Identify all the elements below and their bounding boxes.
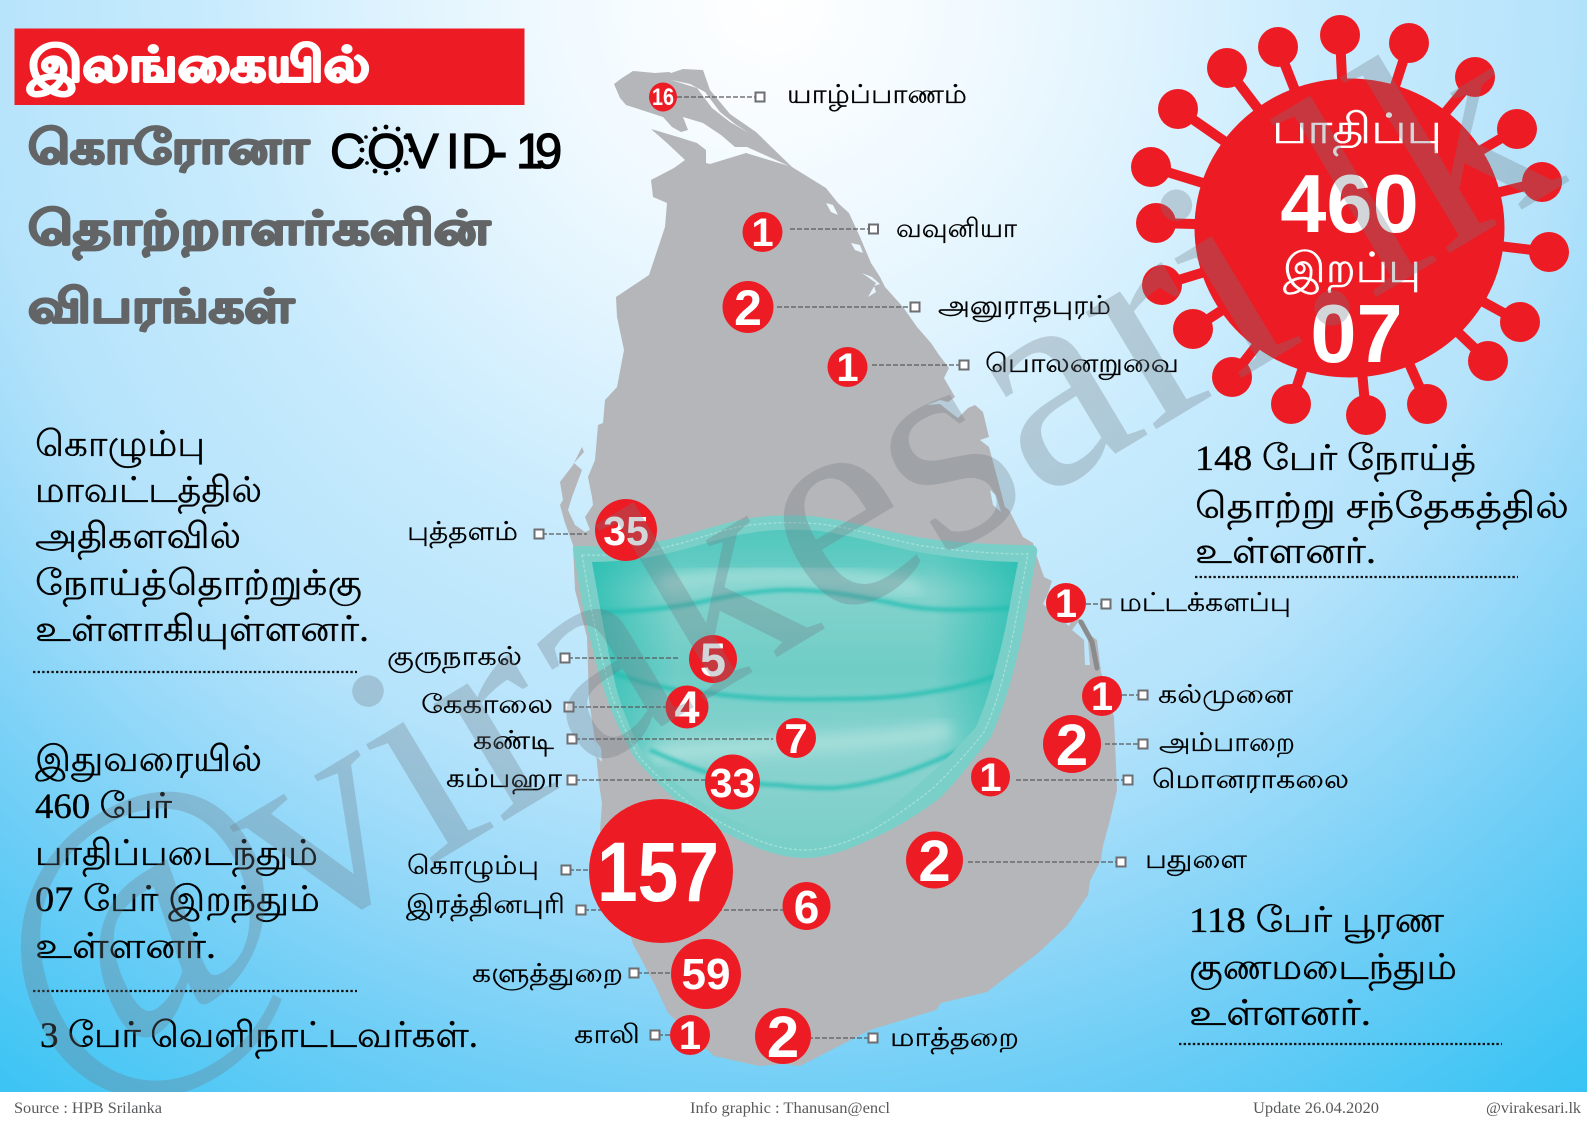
text block: suspected cases: உள்ளனர்.	[1195, 531, 1376, 571]
district count markers	[589, 82, 1122, 1070]
text block: totals so far: பாதிப்படைந்தும்	[35, 833, 318, 877]
affected label: பாதிப்பு	[1272, 105, 1442, 157]
marker: Polonnaruwa 1: 1	[836, 346, 859, 390]
district labels	[387, 80, 1349, 1054]
virus body	[1194, 78, 1504, 378]
marker: Puttalam 35	[595, 499, 657, 561]
title line: corona: கொரோனா	[28, 122, 310, 173]
title line: cases: தொற்றாளர்களின்	[28, 203, 492, 260]
affected count: 460	[1280, 157, 1419, 250]
district labels: கண்டி	[473, 726, 554, 757]
district labels: கம்பஹா	[446, 764, 562, 794]
marker: Matara 2	[755, 1005, 811, 1070]
marker: Kalmunai 1	[1082, 675, 1122, 719]
marker: Kandy 7	[776, 715, 816, 762]
marker: Polonnaruwa 1	[828, 346, 868, 390]
text block: Colombo district: கொழும்பு	[35, 424, 205, 468]
district labels: பதுளை	[1145, 845, 1248, 876]
district labels: மட்டக்களப்பு	[1119, 588, 1291, 617]
marker: Vavuniya 1: 1	[751, 211, 774, 255]
district labels: யாழ்ப்பாணம்	[787, 80, 967, 111]
surgical mask	[573, 515, 1037, 858]
text block: recovered: 118 பேர் பூரண	[1189, 900, 1444, 943]
virus dots around the O	[360, 125, 413, 175]
marker: Kurunegala 5: 5	[700, 633, 726, 686]
text block: Colombo district: உள்ளாகியுள்ளனர்.	[35, 609, 369, 649]
footer source: Source : HPB Srilanka	[14, 1100, 162, 1117]
marker: Badulla 2: 2	[918, 829, 951, 894]
marker: Batticaloa 1: 1	[1055, 582, 1077, 626]
title banner: இலங்கையில்	[27, 39, 370, 96]
mask inner panel	[592, 530, 1018, 842]
text block: Colombo district	[33, 424, 369, 672]
text block: suspected cases	[1195, 438, 1569, 577]
text block: Colombo district: மாவட்டத்தில்	[35, 470, 262, 514]
Batticaloa lagoon strip	[1081, 622, 1097, 668]
text block: Colombo district: நோய்த்தொற்றுக்கு	[35, 563, 362, 607]
marker: Kalutara 59: 59	[682, 950, 730, 999]
marker: Kalutara 59	[671, 939, 741, 1009]
marker: Monaragala 1: 1	[979, 756, 1002, 800]
deaths count: 07	[1310, 287, 1403, 380]
marker: Matara 2: 2	[767, 1005, 799, 1070]
marker: Kegalle 4: 4	[674, 682, 700, 733]
district labels: குருநாகல்	[387, 642, 522, 673]
marker: Galle 1: 1	[679, 1014, 701, 1058]
marker: Galle 1	[670, 1014, 710, 1058]
district labels: மொனராகலை	[1152, 765, 1349, 794]
text block: foreigners: 3 பேர் வெளிநாட்டவர்கள்.	[40, 1015, 478, 1059]
connector leaders	[542, 97, 1140, 1038]
marker: Colombo 157	[589, 799, 733, 943]
district labels: அம்பாறை	[1159, 728, 1295, 758]
mask outer band	[573, 515, 1037, 858]
district labels: பொலனறுவை	[985, 349, 1179, 380]
marker: Ratnapura 6	[782, 881, 830, 933]
district labels: கேகாலை	[421, 690, 553, 719]
text block: totals so far: 07 பேர் இறந்தும்	[35, 879, 320, 923]
district labels: இரத்தினபுரி	[406, 890, 565, 921]
district labels: மாத்தறை	[890, 1023, 1019, 1054]
marker: Kandy 7: 7	[784, 715, 808, 762]
COVID-19 wordmark: COVID-19	[330, 125, 562, 179]
title line: details: விபரங்கள்	[28, 281, 295, 332]
text block: Colombo district: அதிகளவில்	[35, 516, 241, 560]
text block: suspected cases: தொற்று சந்தேகத்தில்	[1195, 486, 1569, 530]
deaths label: இறப்பு	[1283, 244, 1421, 294]
marker: Anuradhapura 2: 2	[734, 280, 762, 336]
text block: recovered: உள்ளனர்.	[1189, 993, 1371, 1033]
land outline	[560, 69, 1117, 1066]
COVID-19 logo	[330, 125, 562, 179]
marker: Puttalam 35: 35	[603, 508, 649, 554]
mask stitching	[582, 523, 1028, 850]
text block: totals so far	[33, 739, 357, 991]
footer handle: @virakesari.lk	[1486, 1100, 1581, 1117]
text block: totals so far: இதுவரையில்	[35, 739, 262, 782]
marker: Badulla 2	[906, 829, 963, 894]
district labels: கல்முனை	[1158, 680, 1294, 711]
marker: Vavuniya 1	[742, 211, 782, 255]
marker: Jaffna 16: 16	[652, 84, 674, 111]
marker: Gampaha 33: 33	[710, 760, 755, 806]
footer update date: Update 26.04.2020	[1253, 1100, 1379, 1117]
marker: Gampaha 33	[705, 754, 760, 810]
marker: Anuradhapura 2	[722, 280, 774, 336]
marker: Colombo 157: 157	[597, 825, 719, 919]
footer	[0, 1092, 1587, 1123]
footer credit: Info graphic : Thanusan@encl	[690, 1100, 891, 1117]
marker: Kurunegala 5	[689, 633, 737, 686]
map of Sri Lanka	[560, 69, 1117, 1066]
marker: Kalmunai 1: 1	[1091, 675, 1113, 719]
text block: recovered	[1179, 900, 1502, 1044]
marker: Ampara 2	[1043, 713, 1101, 778]
mask shading and folds	[592, 530, 1018, 792]
district labels: புத்தளம்	[407, 517, 518, 548]
marker: Ratnapura 6: 6	[794, 881, 819, 933]
district labels: வவுனியா	[896, 214, 1017, 243]
text block: suspected cases: 148 பேர் நோய்த்	[1195, 438, 1476, 482]
text block: totals so far: 460 பேர்	[35, 786, 172, 826]
text block: totals so far: உள்ளனர்.	[35, 926, 216, 966]
district labels: களுத்துறை	[472, 959, 623, 990]
district labels: காலி	[574, 1020, 640, 1049]
marker: Monaragala 1	[971, 756, 1010, 800]
text block: recovered: குணமடைந்தும்	[1189, 947, 1457, 991]
marker: Kegalle 4	[666, 682, 708, 733]
connector end squares	[534, 92, 1148, 1042]
district labels: அனுராதபுரம்	[938, 291, 1111, 322]
district labels: கொழும்பு	[407, 851, 539, 882]
marker: Batticaloa 1	[1046, 582, 1086, 626]
marker: Ampara 2: 2	[1056, 713, 1088, 778]
title banner	[14, 28, 524, 105]
virus spikes	[1131, 15, 1569, 435]
virus graphic with totals	[1131, 15, 1569, 435]
